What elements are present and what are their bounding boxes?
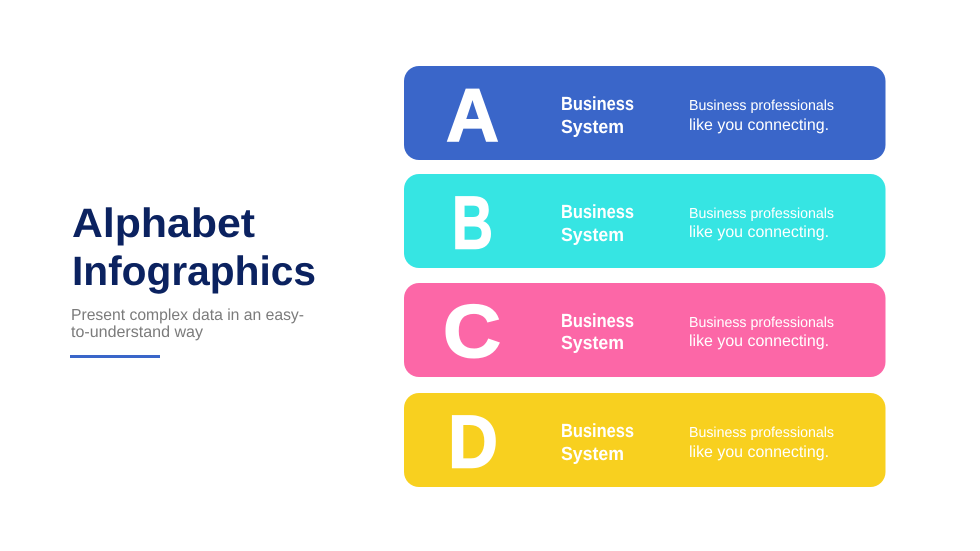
heading B: Business [561, 202, 634, 223]
subtitle: Present complex data in an easy- [71, 307, 304, 324]
heading A: System [561, 117, 624, 138]
description B: like you connecting. [689, 224, 829, 241]
panel: C [404, 283, 886, 377]
heading D: System [561, 444, 624, 465]
title [72, 200, 316, 294]
letter B: B [452, 180, 493, 264]
heading C [561, 311, 634, 354]
description A [689, 98, 834, 134]
accent underline [70, 355, 160, 358]
description D: Business professionals [689, 425, 834, 441]
letter A: A [446, 73, 499, 157]
description C: Business professionals [689, 315, 834, 331]
heading A: Business [561, 94, 634, 115]
subtitle: to-understand way [71, 324, 203, 341]
description C: like you connecting. [689, 333, 829, 350]
heading B: System [561, 225, 624, 246]
description A: like you connecting. [689, 117, 829, 134]
panel: A [404, 66, 886, 160]
heading A [561, 94, 634, 138]
description D [689, 425, 834, 461]
heading D [561, 421, 634, 465]
description B: Business professionals [689, 206, 834, 222]
letter C: C [443, 289, 501, 373]
panel: B [404, 174, 886, 268]
heading C: Business [561, 311, 634, 332]
letter D: D [448, 400, 498, 484]
description A: Business professionals [689, 98, 834, 114]
title: Infographics [72, 248, 316, 294]
heading B [561, 202, 634, 246]
description B [689, 206, 834, 241]
heading C: System [561, 333, 624, 354]
panel: D [404, 393, 886, 487]
description D: like you connecting. [689, 444, 829, 461]
title: Alphabet [72, 200, 255, 246]
heading D: Business [561, 421, 634, 442]
subtitle [71, 307, 304, 341]
description C [689, 315, 834, 350]
